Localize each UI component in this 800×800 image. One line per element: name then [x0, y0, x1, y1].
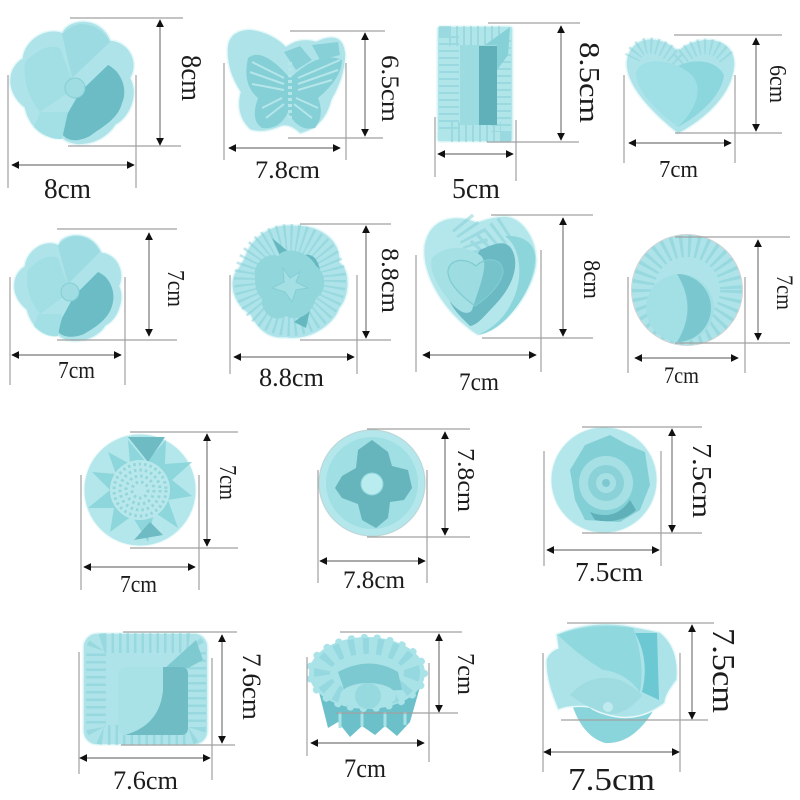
width dimension: 7cm: [81, 475, 199, 598]
width dimension: 7cm: 7cm: [459, 369, 500, 396]
height dimension: 6.5cm: [288, 31, 403, 138]
height dimension: 8cm: 8cm: [175, 55, 207, 101]
width dimension: 7cm: 7cm: [664, 363, 699, 388]
height dimension: 8cm: [68, 18, 207, 146]
mould: round fluted cup: [628, 234, 797, 388]
mould: large heart: [416, 215, 604, 396]
height dimension: 6.5cm: 6.5cm: [376, 55, 403, 123]
height dimension: 7.6cm: 7.6cm: [237, 653, 266, 720]
mould: sunburst star: [81, 432, 240, 598]
height dimension: 7.6cm: [121, 632, 266, 745]
width dimension: 5cm: 5cm: [452, 174, 500, 205]
width dimension: 7.5cm: 7.5cm: [575, 557, 643, 587]
width dimension: 7cm: [307, 657, 429, 783]
height dimension: 7.5cm: [582, 427, 717, 533]
flower shape: [10, 21, 134, 145]
height dimension: 8.5cm: 8.5cm: [573, 42, 605, 123]
tulip shape: [546, 624, 677, 743]
petal shape: [232, 225, 348, 339]
height dimension: 8.8cm: [300, 224, 403, 340]
heart shape: [626, 39, 735, 134]
width dimension: 7.8cm: 7.8cm: [255, 157, 321, 184]
height dimension: 7.5cm: 7.5cm: [687, 443, 717, 518]
mould: scalloped tart: [307, 632, 478, 783]
mould: rectangle loaf: [435, 23, 605, 205]
height dimension: 7cm: 7cm: [214, 465, 240, 500]
mould: large flower 8cm: [8, 18, 207, 205]
width dimension: 8.8cm: 8.8cm: [259, 363, 324, 392]
width dimension: 7.5cm: 7.5cm: [568, 761, 655, 797]
height dimension: 7cm: [57, 229, 188, 340]
width dimension: 7cm: 7cm: [344, 754, 386, 783]
mould: five petal flower: [230, 224, 403, 392]
ring shape: [319, 430, 425, 536]
height dimension: 8cm: 8cm: [578, 260, 604, 299]
width dimension: 8cm: 8cm: [44, 173, 91, 205]
width dimension: 7.8cm: 7.8cm: [343, 567, 406, 594]
height dimension: 7cm: 7cm: [772, 275, 797, 310]
height dimension: 7cm: [130, 432, 240, 548]
width dimension: 7cm: [628, 277, 745, 388]
height dimension: 7cm: 7cm: [452, 653, 478, 695]
fluted round shape: [631, 234, 743, 346]
width dimension: 8cm: [8, 75, 136, 205]
width dimension: 8.8cm: [230, 275, 357, 392]
width dimension: 7.6cm: [79, 652, 212, 795]
butterfly shape: [227, 29, 346, 134]
mould: bundt ring: [318, 429, 478, 594]
width dimension: 7cm: 7cm: [659, 157, 698, 183]
height dimension: 7.8cm: [367, 429, 478, 537]
width dimension: 7.5cm: [543, 653, 680, 797]
mould: small flower 7cm: [10, 229, 188, 385]
star shape: [84, 434, 196, 546]
tart shape: [309, 637, 425, 737]
square shape: [83, 633, 208, 745]
height dimension: 8.8cm: 8.8cm: [376, 248, 403, 314]
width dimension: 7cm: 7cm: [120, 572, 157, 598]
width dimension: 7.8cm: [318, 470, 427, 594]
height dimension: 6cm: 6cm: [764, 65, 790, 103]
height dimension: 7cm: [336, 632, 478, 713]
height dimension: 7.5cm: 7.5cm: [706, 628, 742, 713]
mould: rose: [544, 427, 717, 587]
mould: butterfly: [224, 29, 403, 184]
width dimension: 7.6cm: 7.6cm: [113, 766, 178, 795]
width dimension: 7cm: [624, 75, 735, 183]
height dimension: 6cm: [674, 35, 790, 133]
width dimension: 7.8cm: [224, 63, 346, 184]
width dimension: 5cm: [435, 117, 516, 205]
height dimension: 7cm: [675, 237, 797, 343]
mould: fluted square: [79, 632, 266, 795]
height dimension: 7.8cm: 7.8cm: [452, 448, 478, 512]
height dimension: 7.5cm: [561, 623, 742, 720]
heart shape: [424, 216, 537, 335]
height dimension: 7cm: 7cm: [162, 270, 188, 307]
rectangle shape: [437, 26, 513, 142]
mould: tulip: [543, 623, 742, 797]
height dimension: 8cm: [482, 215, 604, 338]
width dimension: 7cm: [10, 277, 125, 385]
flower shape: [13, 234, 122, 342]
width dimension: 7cm: 7cm: [58, 358, 95, 384]
mould: small heart: [624, 35, 790, 183]
width dimension: 7cm: [416, 250, 541, 396]
rose shape: [551, 427, 657, 533]
height dimension: 8.5cm: [487, 23, 605, 142]
width dimension: 7.5cm: [544, 451, 661, 587]
